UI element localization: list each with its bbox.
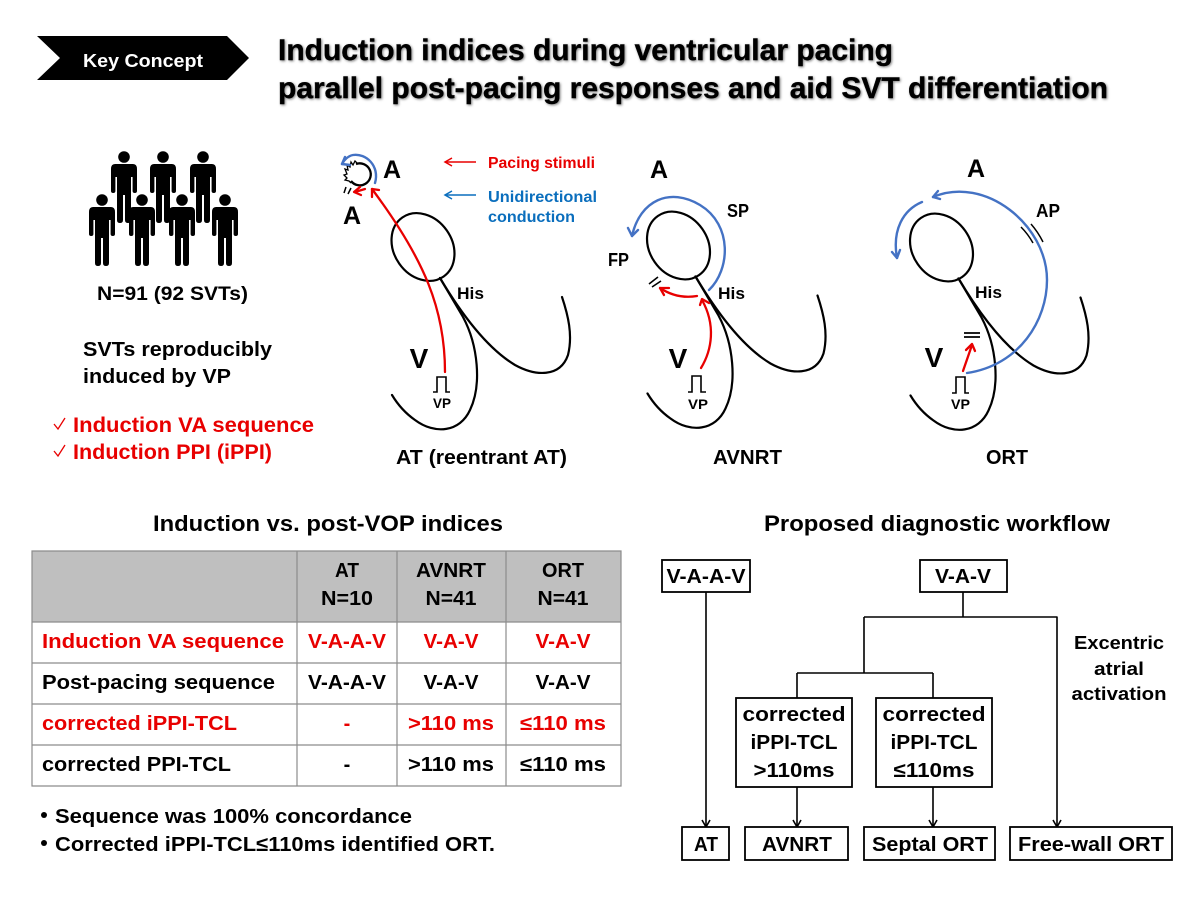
AT labels: A: [383, 156, 401, 184]
row: induction VA sequence: V-A-V: [536, 631, 591, 653]
row: induction VA sequence: V-A-V: [424, 631, 479, 653]
inclusion text: induced by VP: [83, 365, 231, 388]
box: septal ORT: [864, 827, 995, 860]
box: V-A-A-V: V-A-A-V: [666, 566, 746, 588]
table footnotes: Sequence was 100% concordance: [55, 805, 412, 828]
AVNRT labels: V: [669, 343, 688, 374]
legend: conduction: [488, 209, 575, 226]
table header row: N=10: [321, 588, 373, 610]
red arrows: retrograde conduction: [660, 288, 711, 368]
workflow heading: Proposed diagnostic workflow: [764, 511, 1111, 536]
box: AT: AT: [694, 834, 718, 856]
row: corrected PPI-TCL: -: [344, 754, 350, 776]
workflow connectors: [702, 592, 1061, 827]
box: corrected iPPI-TCL over 110 ms: corrected: [742, 703, 846, 726]
row: corrected iPPI-TCL: corrected iPPI-TCL: [42, 712, 237, 735]
checklist: Induction PPI (iPPI): [73, 441, 272, 464]
box: corrected iPPI-TCL over 110 ms: [736, 698, 852, 787]
AT caption: AT (reentrant AT): [396, 447, 567, 469]
legend: [445, 155, 597, 226]
panel: AT diagram: [342, 155, 570, 469]
key concept banner: [37, 36, 249, 80]
row: post-pacing sequence: [42, 671, 591, 694]
row: corrected PPI-TCL: corrected PPI-TCL: [42, 753, 231, 776]
row: induction VA sequence: V-A-A-V: [308, 631, 387, 653]
panel: indices table: [32, 511, 621, 856]
AT labels: A: [343, 202, 361, 230]
table heading: Induction vs. post-VOP indices: [153, 511, 503, 536]
box: AVNRT: AVNRT: [762, 834, 832, 856]
pacing pulse: VP: [951, 396, 970, 412]
heart conduction outline: [379, 201, 570, 429]
box: V-A-A-V: [662, 560, 750, 592]
heart conduction outline: [634, 199, 826, 428]
key concept banner: Key Concept: [83, 51, 203, 71]
icon: group of patients: [89, 151, 238, 266]
excentric atrial activation label: Excentric: [1074, 632, 1164, 653]
row: induction VA sequence: Induction VA sequence: [42, 630, 284, 653]
block marks: [649, 277, 661, 287]
checklist: Induction VA sequence: [73, 414, 314, 437]
pacing pulse: [433, 377, 451, 411]
red arrow: pacing to atrium: [354, 187, 445, 372]
table header row: [32, 551, 621, 622]
AVNRT labels: His: [718, 285, 745, 303]
title: parallel post-pacing responses and aid SVT differentiation: [278, 72, 1108, 105]
box: corrected iPPI-TCL up to 110 ms: ≤110ms: [894, 759, 974, 782]
excentric atrial activation label: activation: [1072, 683, 1166, 704]
row: corrected PPI-TCL: ≤110 ms: [520, 754, 606, 776]
red arrow: pacing stimulus: [963, 344, 975, 371]
ORT labels: [925, 155, 1060, 373]
pacing pulse: VP: [688, 396, 708, 412]
block marks: [344, 187, 351, 194]
row: post-pacing sequence: V-A-V: [536, 672, 591, 694]
excentric atrial activation label: atrial: [1094, 658, 1144, 679]
pacing pulse: VP: [433, 395, 451, 411]
ORT labels: His: [975, 284, 1002, 302]
table header row: AVNRT: [416, 560, 486, 582]
panel: ORT diagram: [892, 155, 1089, 469]
atrial reentry circuit: [342, 155, 376, 185]
ORT caption: ORT: [986, 447, 1028, 469]
ORT labels: V: [925, 342, 944, 373]
table header row: N=41: [426, 588, 476, 610]
AT labels: [343, 156, 484, 374]
patient count: N=91 (92 SVTs): [97, 283, 248, 305]
ventricular block marks: [964, 333, 980, 337]
panel: diagnostic workflow: [662, 511, 1172, 860]
row: corrected iPPI-TCL: -: [344, 713, 350, 735]
box: septal ORT: Septal ORT: [872, 834, 988, 856]
table footnotes: [41, 805, 495, 856]
box: free-wall ORT: [1010, 827, 1172, 860]
box: corrected iPPI-TCL over 110 ms: iPPI-TCL: [750, 731, 838, 754]
box: V-A-V: V-A-V: [935, 566, 992, 588]
box: corrected iPPI-TCL up to 110 ms: [876, 698, 992, 787]
inclusion text: SVTs reproducibly: [83, 338, 273, 361]
AVNRT labels: FP: [608, 250, 629, 270]
row: corrected iPPI-TCL: ≤110 ms: [520, 713, 606, 735]
panel: study population: [54, 151, 314, 464]
box: free-wall ORT: Free-wall ORT: [1018, 834, 1164, 856]
panel: AVNRT diagram: [608, 156, 826, 469]
AVNRT labels: SP: [727, 201, 749, 221]
AVNRT labels: A: [650, 156, 668, 184]
row: corrected PPI-TCL: >110 ms: [408, 754, 494, 776]
table header row: ORT: [542, 560, 584, 582]
legend: Pacing stimuli: [488, 155, 595, 172]
accessory pathway marks: [1021, 224, 1043, 243]
row: induction VA sequence: [42, 630, 591, 653]
AVNRT caption: AVNRT: [713, 447, 782, 469]
inclusion text: [83, 338, 273, 388]
checklist: [54, 414, 314, 464]
table header row: N=41: [538, 588, 588, 610]
box: V-A-V: [920, 560, 1007, 592]
box: AT: [682, 827, 729, 860]
row: corrected iPPI-TCL: [42, 712, 606, 735]
row: post-pacing sequence: Post-pacing sequence: [42, 671, 275, 694]
heart conduction outline: [897, 201, 1089, 430]
box: AVNRT: [745, 827, 848, 860]
blue arrow: accessory pathway circuit: [892, 191, 1047, 373]
AT labels: V: [410, 343, 429, 374]
box: corrected iPPI-TCL over 110 ms: >110ms: [754, 759, 834, 782]
legend: Unidirectional: [488, 189, 597, 206]
blue arrow: slow pathway: [628, 197, 725, 290]
AVNRT labels: [608, 156, 749, 374]
pacing pulse: [951, 377, 970, 412]
excentric atrial activation label: [1072, 632, 1166, 704]
row: post-pacing sequence: V-A-A-V: [308, 672, 387, 694]
table footnotes: Corrected iPPI-TCL≤110ms identified ORT.: [55, 833, 495, 856]
box: corrected iPPI-TCL up to 110 ms: iPPI-TCL: [890, 731, 978, 754]
table header row: AT: [335, 560, 359, 582]
box: corrected iPPI-TCL up to 110 ms: corrected: [882, 703, 986, 726]
ORT labels: AP: [1036, 201, 1060, 221]
AT labels: His: [457, 285, 484, 303]
title: Induction indices during ventricular pacing: [278, 34, 893, 67]
row: corrected PPI-TCL: [42, 753, 606, 776]
pacing pulse: [688, 376, 708, 412]
ORT labels: A: [967, 155, 985, 183]
title: [278, 34, 1108, 105]
row: corrected iPPI-TCL: >110 ms: [408, 713, 494, 735]
row: post-pacing sequence: V-A-V: [424, 672, 479, 694]
